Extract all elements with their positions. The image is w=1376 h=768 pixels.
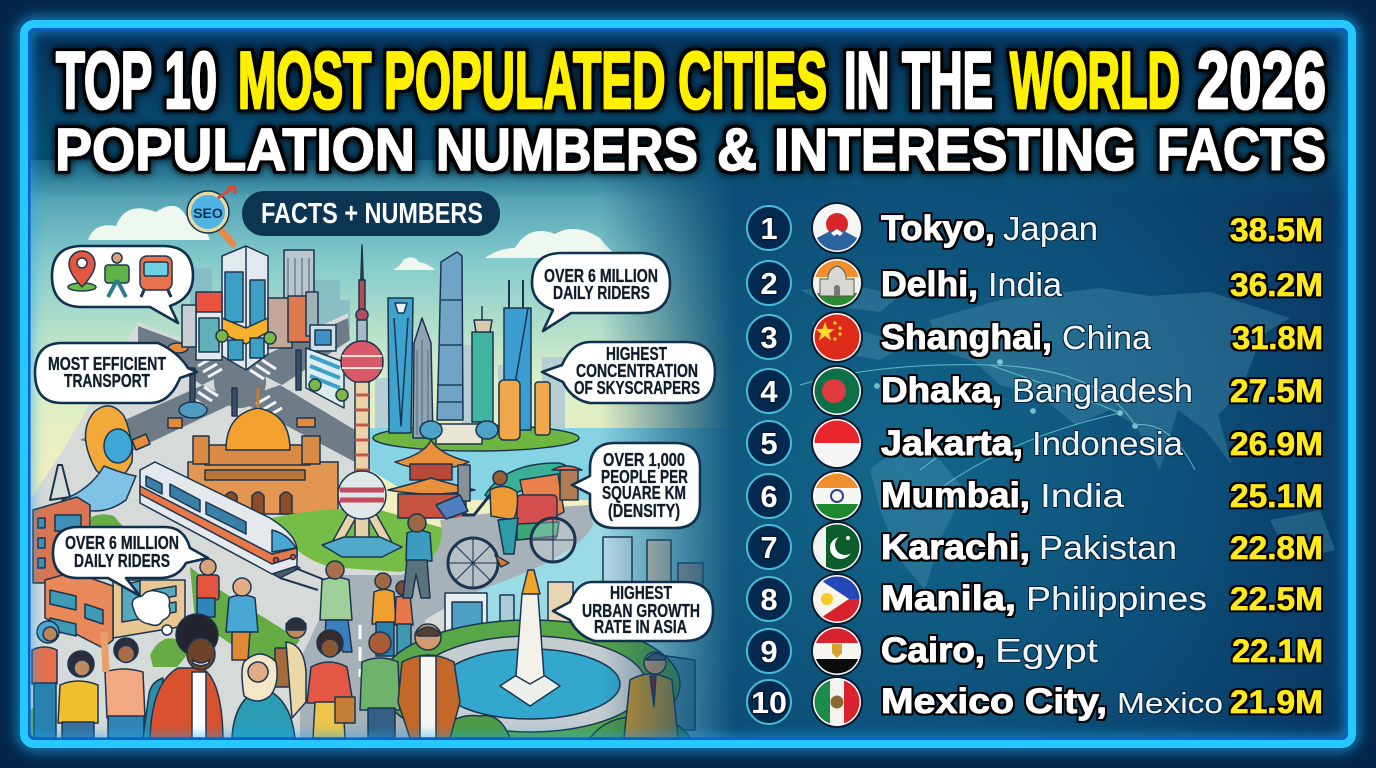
row 9: Cairo: Cairo, bbox=[881, 631, 985, 670]
row 8: Manila: 22.5M bbox=[1230, 581, 1323, 617]
badge: facts + numbers: FACTS + NUMBERS bbox=[261, 198, 483, 230]
callout: highest concentration of skyscrapers: HIGHEST bbox=[606, 344, 667, 364]
row 2: Delhi: 2 bbox=[760, 266, 778, 301]
network arcs bbox=[800, 360, 1195, 500]
pagoda bbox=[388, 440, 475, 518]
row 6: Mumbai: 6 bbox=[760, 479, 778, 514]
row 7: Karachi bbox=[747, 521, 1323, 573]
sky bbox=[30, 160, 730, 528]
row 9: Cairo: 9 bbox=[760, 634, 778, 669]
top band bbox=[30, 30, 1346, 200]
row 6: Mumbai: India bbox=[1040, 477, 1125, 514]
plaza sky bbox=[475, 519, 721, 738]
skyscrapers on island bbox=[373, 252, 579, 451]
icon: map pin bbox=[68, 251, 96, 291]
callout: over 6 million daily riders (top): DAILY RIDERS bbox=[553, 283, 650, 303]
callout: most efficient transport bbox=[35, 343, 197, 403]
callout: over 1,000 people per square km: OVER 1,000 bbox=[603, 450, 685, 470]
callout: over 1,000 people per square km: PEOPLE PER bbox=[601, 467, 688, 487]
row 4: Dhaka: 27.5M bbox=[1230, 373, 1323, 409]
callout: highest urban growth rate in asia bbox=[553, 582, 713, 641]
callout: over 6 million daily riders (left): OVER 6 MILLION bbox=[65, 533, 179, 553]
title line 2: INTERESTING bbox=[774, 117, 1136, 183]
row 8: Manila: 8 bbox=[760, 582, 778, 617]
river bbox=[370, 428, 724, 505]
row 3: Shanghai: 31.8M bbox=[1232, 320, 1323, 356]
row 3: Shanghai: China bbox=[1062, 319, 1152, 356]
row 3: Shanghai: 3 bbox=[760, 320, 778, 355]
icon: walker bbox=[105, 253, 129, 297]
row 4: Dhaka: 4 bbox=[760, 374, 778, 409]
callout: icons bbox=[52, 246, 193, 323]
ranking list bbox=[747, 202, 1323, 728]
row 5: Jakarta: Jakarta, bbox=[881, 424, 1023, 463]
row 5: Jakarta: 5 bbox=[760, 426, 778, 461]
title line 2: FACTS bbox=[1157, 117, 1326, 183]
row 9: Cairo bbox=[747, 625, 1323, 677]
callout: over 6 million daily riders (top): OVER 6 MILLION bbox=[544, 266, 658, 286]
ground plate bbox=[30, 313, 450, 738]
title line 1: 2026 bbox=[1197, 36, 1326, 126]
callout: over 1,000 people per square km: (DENSITY) bbox=[608, 501, 680, 521]
callout: highest urban growth rate in asia: URBAN GROWTH bbox=[582, 601, 700, 621]
row 4: Dhaka: Bangladesh bbox=[1012, 372, 1193, 409]
rickshaw bbox=[448, 463, 575, 588]
row 5: Jakarta: Indonesia bbox=[1032, 425, 1184, 462]
callout: highest concentration of skyscrapers: CONCENTRATION bbox=[576, 361, 698, 381]
roads bbox=[80, 318, 355, 462]
title line 2 bbox=[55, 117, 1326, 183]
title line 2: POPULATION bbox=[55, 117, 415, 183]
row 7: Karachi: Karachi, bbox=[881, 528, 1030, 567]
callout: over 1,000 people per square km: SQUARE KM bbox=[602, 483, 686, 503]
speech cloud clock bbox=[132, 591, 170, 625]
road dashes bbox=[358, 625, 362, 677]
orange helmet figure bbox=[62, 406, 150, 511]
row 1: Tokyo bbox=[747, 202, 1323, 254]
row 10: Mexico City: Mexico bbox=[1117, 688, 1223, 720]
oriental pearl tower bbox=[322, 245, 402, 557]
row 2: Delhi: Delhi, bbox=[881, 265, 978, 304]
row 8: Manila: Philippines bbox=[1026, 580, 1207, 617]
row 1: Tokyo: Tokyo, bbox=[881, 209, 995, 248]
row 10: Mexico City: 10 bbox=[751, 685, 787, 720]
mid-ground people bbox=[197, 514, 432, 660]
traffic lights and cars bbox=[168, 343, 315, 428]
row 4: Dhaka bbox=[747, 365, 1323, 417]
row 8: Manila bbox=[747, 573, 1323, 625]
foreground crowd bbox=[32, 614, 678, 738]
callout: highest urban growth rate in asia: HIGHEST bbox=[610, 583, 672, 603]
illustration: city scene bbox=[30, 160, 740, 748]
row 5: Jakarta: 26.9M bbox=[1230, 426, 1323, 462]
mosque bbox=[188, 388, 338, 514]
distant skyline right bbox=[375, 345, 565, 430]
callout: most efficient transport: TRANSPORT bbox=[64, 371, 150, 391]
clouds bbox=[88, 206, 622, 270]
row 3: Shanghai bbox=[747, 311, 1323, 363]
row 7: Karachi: Pakistan bbox=[1039, 529, 1177, 566]
plaza towers bbox=[445, 537, 703, 730]
train bbox=[140, 462, 330, 590]
world map backdrop bbox=[800, 284, 1335, 590]
left brick buildings bbox=[33, 465, 185, 648]
grey curved road bbox=[300, 505, 593, 738]
row 10: Mexico City: 21.9M bbox=[1230, 684, 1323, 720]
row 2: Delhi: India bbox=[988, 266, 1063, 303]
row 10: Mexico City: Mexico City, bbox=[881, 682, 1107, 721]
street trees bbox=[216, 330, 348, 401]
callout: over 6 million daily riders (left) bbox=[53, 527, 208, 596]
title line 1: MOST POPULATED CITIES bbox=[238, 36, 827, 126]
central buildings bbox=[182, 246, 344, 408]
callout: most efficient transport: MOST EFFICIENT bbox=[48, 354, 166, 374]
speech cloud bubble bbox=[162, 625, 172, 635]
monument plaza bbox=[380, 570, 690, 748]
title line 1: WORLD bbox=[1010, 36, 1180, 126]
row 6: Mumbai bbox=[747, 470, 1323, 522]
title line 2: & bbox=[717, 117, 757, 183]
icon: SEO magnifier: SEO bbox=[193, 205, 223, 221]
title line 1: IN THE bbox=[844, 36, 993, 126]
callout: over 1,000 people per square km bbox=[572, 443, 700, 528]
callout: over 6 million daily riders (left): DAILY RIDERS bbox=[74, 551, 170, 571]
callout: highest concentration of skyscrapers: OF SKYSCRAPERS bbox=[574, 378, 700, 398]
callout: highest concentration of skyscrapers bbox=[542, 342, 715, 403]
row 9: Cairo: Egypt bbox=[995, 632, 1098, 669]
row 1: Tokyo: 1 bbox=[760, 211, 778, 246]
title line 2: NUMBERS bbox=[436, 117, 698, 183]
crosswalks bbox=[192, 358, 282, 416]
row 5: Jakarta bbox=[747, 417, 1323, 469]
row 6: Mumbai: 25.1M bbox=[1230, 478, 1323, 514]
row 10: Mexico City bbox=[747, 676, 1323, 728]
distant skyline left bbox=[190, 268, 350, 330]
callout: highest urban growth rate in asia: RATE IN ASIA bbox=[594, 617, 687, 637]
row 7: Karachi: 22.8M bbox=[1230, 530, 1323, 566]
icon: SEO magnifier bbox=[187, 187, 235, 244]
green park bbox=[272, 509, 451, 572]
badge: facts + numbers bbox=[242, 191, 500, 236]
row 1: Tokyo: Japan bbox=[1003, 210, 1098, 247]
row 2: Delhi: 36.2M bbox=[1230, 267, 1323, 303]
row 9: Cairo: 22.1M bbox=[1232, 633, 1323, 669]
market stall figures bbox=[436, 465, 582, 519]
row 6: Mumbai: Mumbai, bbox=[881, 476, 1030, 515]
row 4: Dhaka: Dhaka, bbox=[881, 371, 1002, 410]
title line 1: TOP 10 bbox=[56, 36, 217, 126]
row 1: Tokyo: 38.5M bbox=[1230, 212, 1323, 248]
row 8: Manila: Manila, bbox=[881, 579, 1016, 618]
row 2: Delhi bbox=[747, 257, 1323, 309]
row 3: Shanghai: Shanghai, bbox=[881, 318, 1052, 357]
callout: over 6 million daily riders (top) bbox=[532, 253, 670, 331]
grass patches bbox=[30, 514, 300, 738]
row 7: Karachi: 7 bbox=[760, 530, 778, 565]
icon: bus bbox=[140, 256, 172, 297]
